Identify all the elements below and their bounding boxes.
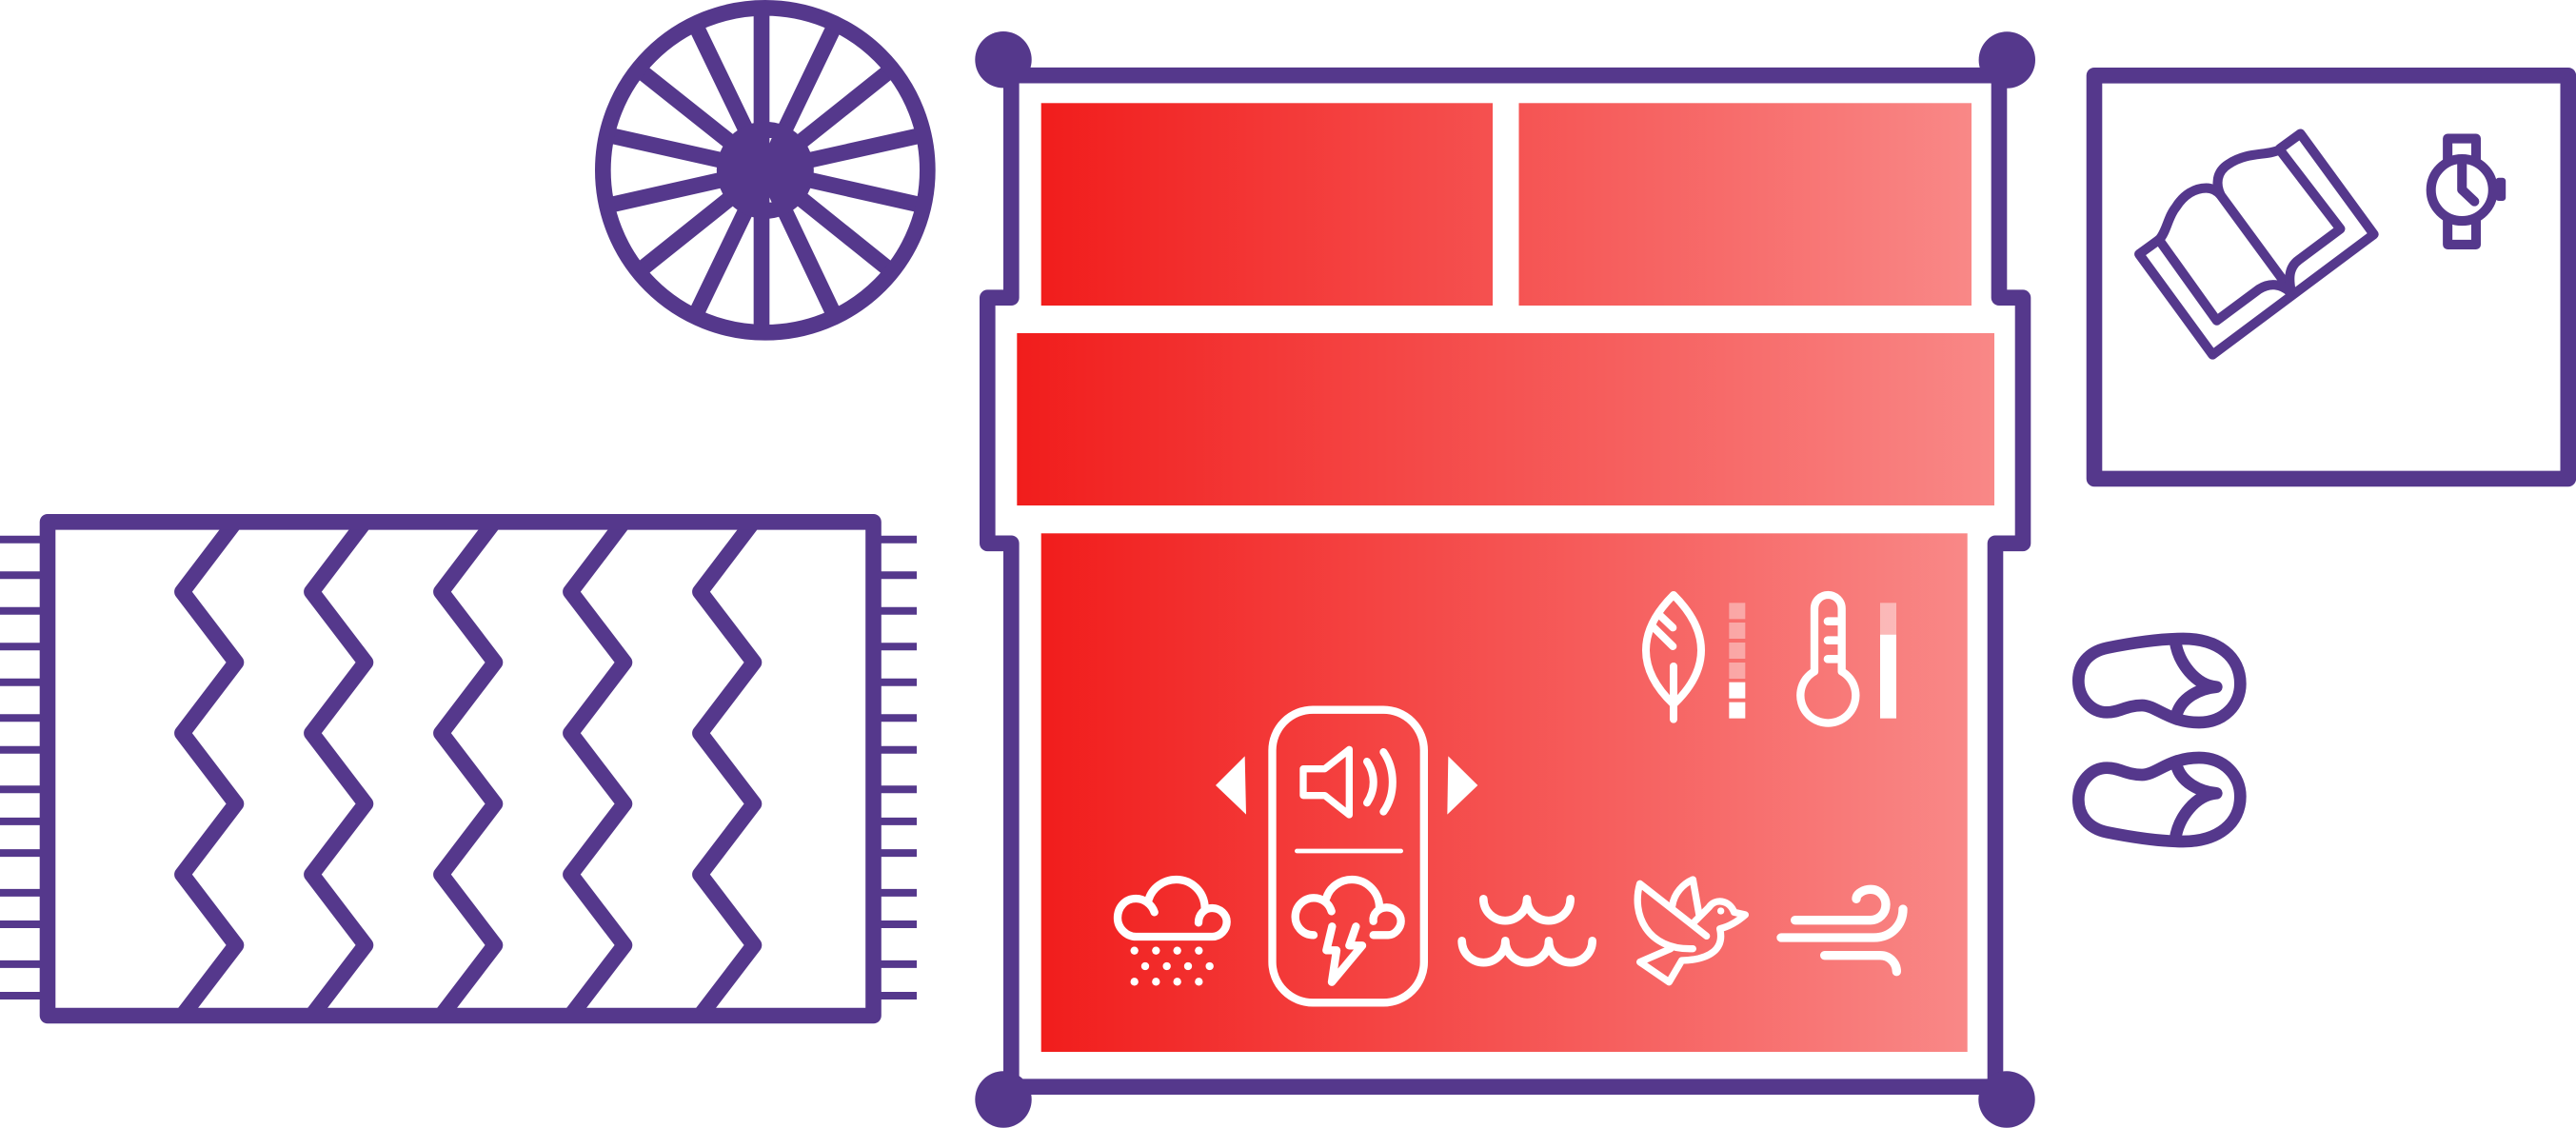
panel: book and watch box	[2094, 75, 2568, 479]
icon: thermometer	[1800, 595, 1855, 723]
frame outline	[987, 75, 2023, 1087]
gradient block: top left	[1041, 103, 1493, 306]
zigzag stripes	[182, 522, 754, 1016]
icon: left triangle	[1216, 756, 1246, 815]
wheel hub	[717, 122, 814, 219]
icon: wind	[1781, 889, 1903, 972]
wheel rim	[603, 8, 927, 332]
panel: main framed area	[975, 31, 2035, 1128]
wheel spokes	[607, 8, 923, 332]
icon: water waves	[1462, 899, 1593, 962]
icon: storm cloud with lightning	[1296, 880, 1401, 982]
left fringe	[0, 540, 40, 996]
icon: speaker with sound waves	[1303, 749, 1393, 815]
leaf level bar	[1729, 603, 1745, 719]
temperature level bar	[1880, 603, 1896, 719]
gradient block: middle	[1017, 333, 1994, 505]
icon: right triangle	[1447, 756, 1477, 815]
pill divider	[1297, 844, 1401, 858]
nature icons group right	[1462, 595, 1903, 982]
gradient block: top right	[1519, 103, 1972, 306]
icon: bird	[1637, 880, 1745, 982]
pill outline	[1272, 710, 1424, 1002]
corner dots	[975, 31, 2035, 1128]
icon: leaf	[1646, 595, 1701, 720]
box outline	[2094, 75, 2568, 479]
icon: spoked wheel	[603, 8, 927, 332]
icon: wristwatch	[2431, 139, 2506, 245]
top flip-flop	[2078, 639, 2240, 722]
weather icons group left	[1118, 710, 1477, 1002]
right fringe	[881, 540, 917, 996]
icon: cloud with snow/rain dots	[1118, 880, 1227, 985]
gradient block: lower	[1041, 533, 1968, 1052]
rug border	[48, 522, 874, 1016]
rug with fringe and zigzag stripes	[0, 522, 917, 1016]
icon: open book	[2139, 134, 2374, 355]
bottom flip-flop	[2078, 758, 2240, 841]
icon: pair of flip-flops	[2078, 639, 2240, 841]
